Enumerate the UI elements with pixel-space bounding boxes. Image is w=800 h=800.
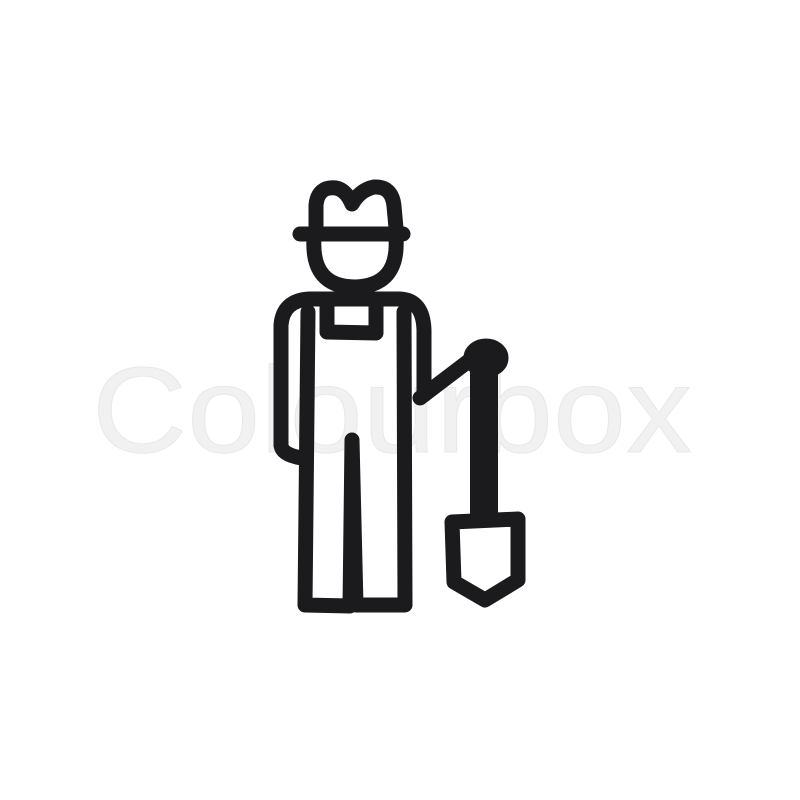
hat <box>300 187 403 234</box>
arm <box>420 355 494 398</box>
watermark text: Colourbox <box>92 342 692 478</box>
hand <box>471 346 501 370</box>
body overalls <box>281 299 424 606</box>
shovel <box>452 370 518 600</box>
icon: farmer <box>281 187 518 606</box>
face <box>314 238 396 287</box>
